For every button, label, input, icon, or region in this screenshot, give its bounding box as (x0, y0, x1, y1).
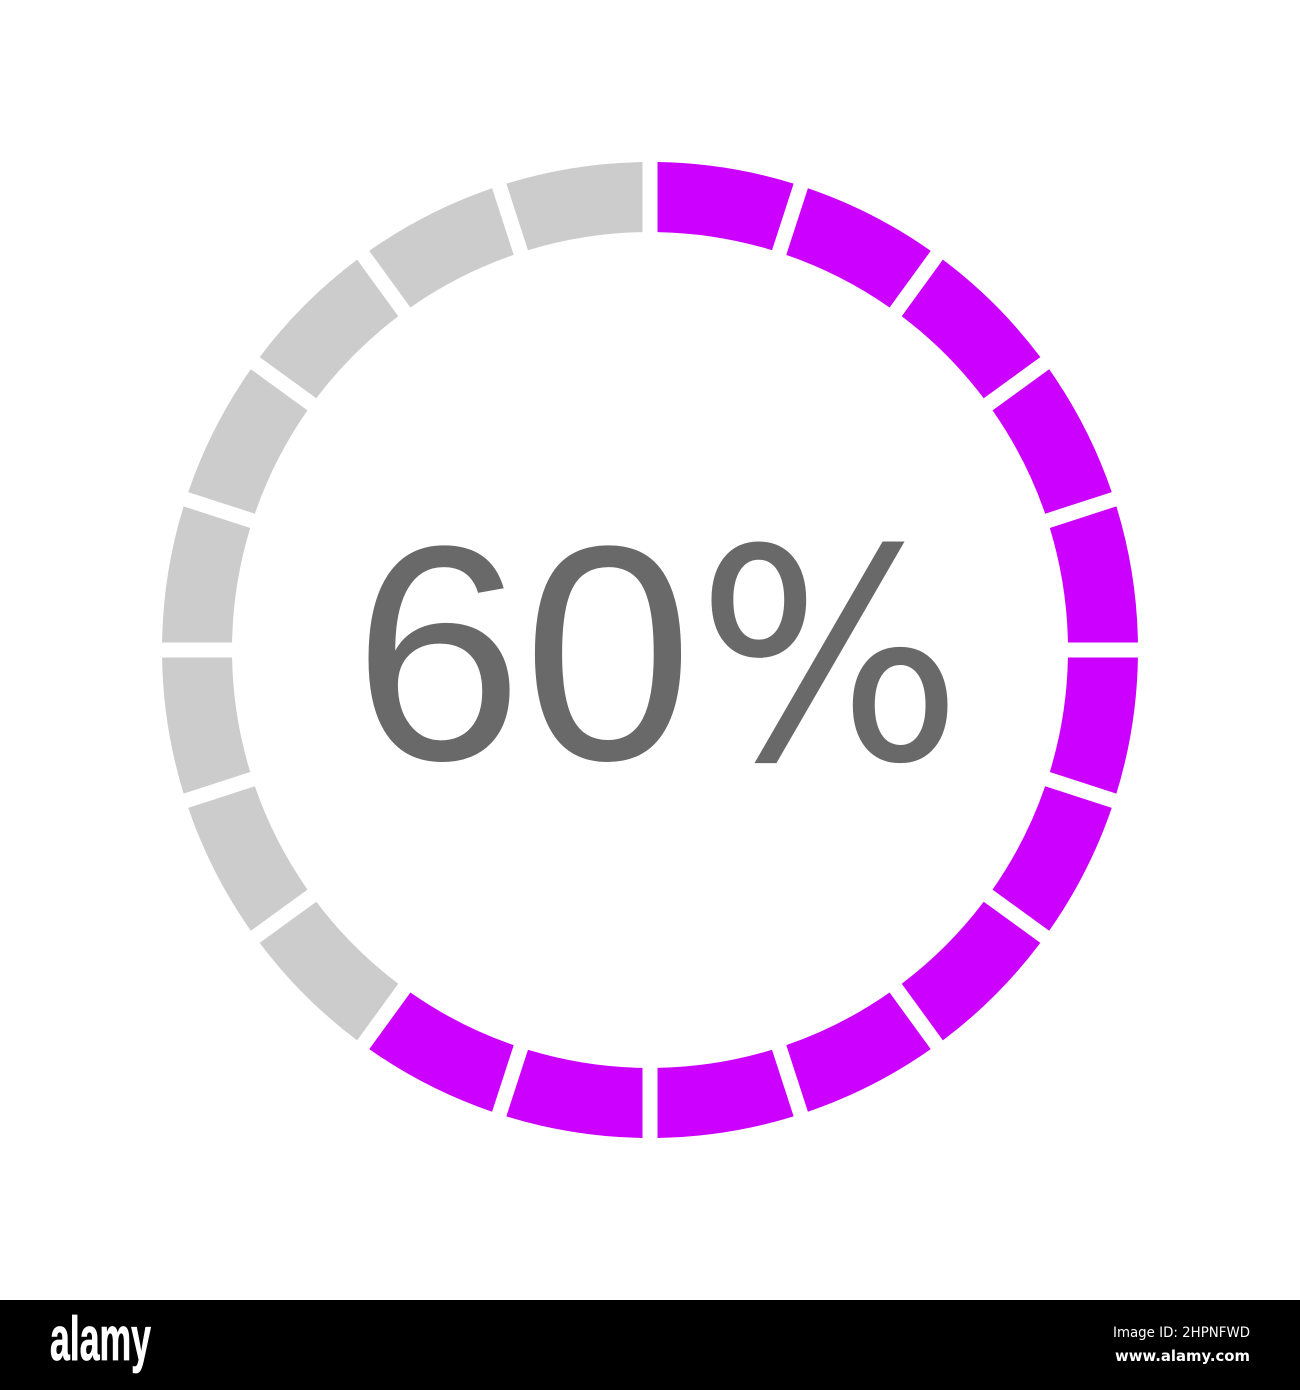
unfilled segments: remaining 40 percent (142, 142, 663, 1040)
center percentage label: % (696, 488, 963, 829)
footer website: www.alamy.com (1115, 1347, 1250, 1365)
filled segments: 60 percent (363, 162, 1158, 1158)
chart: segmented progress ring (142, 142, 1158, 1158)
footer logo: alamy: alamy (50, 1305, 151, 1374)
footer bar (0, 1300, 1300, 1390)
center percentage label: 60 (353, 482, 693, 824)
footer image id: Image ID: 2HPNFWD (1113, 1325, 1250, 1341)
